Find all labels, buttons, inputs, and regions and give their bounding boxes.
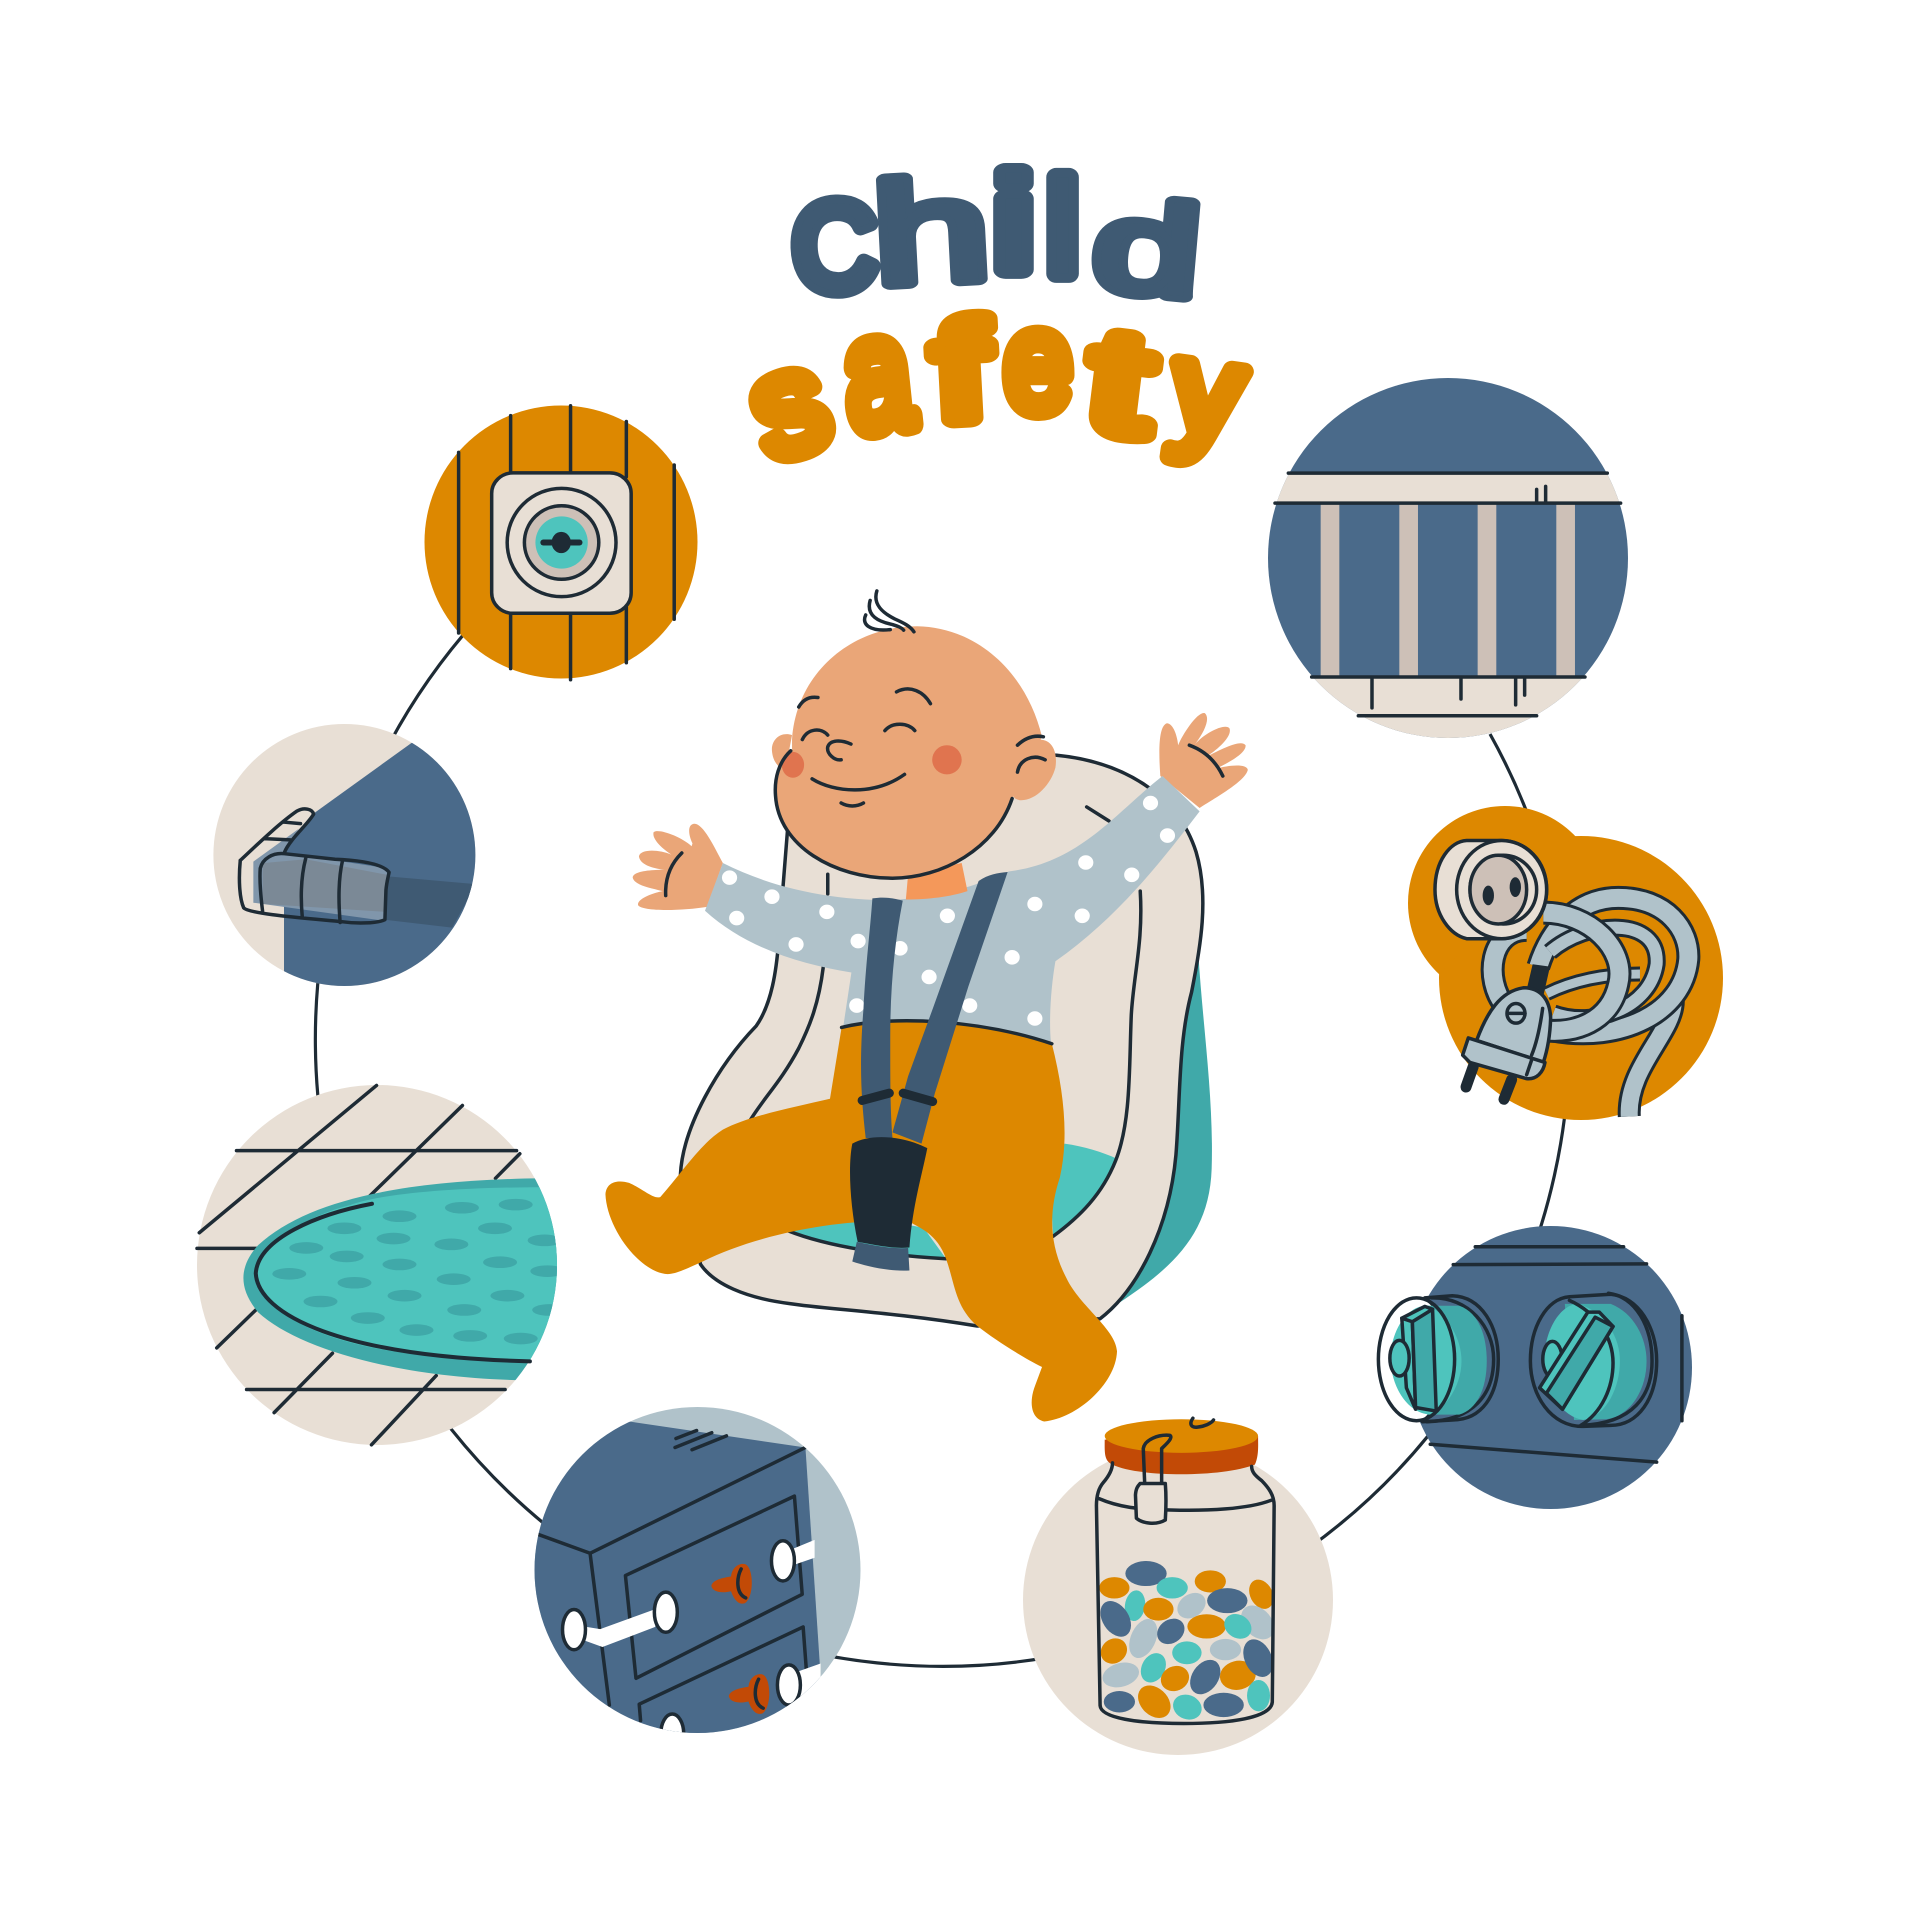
wall plank lines and socket plate: [459, 406, 674, 680]
protector pad: [239, 809, 389, 923]
title: safety: e: [1005, 283, 1071, 440]
title: Child: C: [790, 178, 879, 317]
strap clips: [862, 1093, 933, 1102]
panel: door latches: [1378, 1226, 1692, 1509]
cable coils: [1493, 898, 1688, 1116]
panel: cabinet drawer locks: [534, 1407, 860, 1733]
baby in car seat: [605, 591, 1248, 1421]
seat shell back: [1118, 953, 1212, 1304]
title: safety: s: [730, 318, 846, 490]
waistband line: [842, 1021, 1052, 1044]
title: safety: f: [931, 293, 991, 449]
title: safety: t: [1082, 299, 1159, 466]
panel: unplugged cable and wall socket: [1408, 806, 1723, 1120]
seat cushion: [680, 755, 1203, 1326]
panel: socket cover on wooden wall: [424, 406, 698, 680]
red knobs: [711, 1564, 769, 1714]
seat pad: [788, 1144, 1117, 1259]
title: Child: h: [870, 148, 993, 315]
panel: corner protector: [214, 724, 476, 986]
title: safety: [730, 283, 1251, 490]
harness straps: [861, 872, 1008, 1144]
onesie top with polka dots: [705, 776, 1200, 1043]
rail lines: [1275, 473, 1621, 716]
seat inner lines: [750, 807, 1141, 1259]
bath mat with dots: [243, 1178, 570, 1381]
harness buckle: [850, 1137, 927, 1248]
strap ends: [563, 1541, 800, 1754]
wall socket: [1435, 840, 1547, 939]
neck: [906, 863, 967, 900]
cabinet body: [534, 1422, 821, 1733]
title: Child: i: [994, 149, 1033, 298]
jar lid: [1105, 1436, 1258, 1474]
head: [772, 591, 1056, 878]
pants: [605, 1021, 1117, 1421]
title: Child: l: [1047, 154, 1078, 303]
panel: anti-slip bath mat on tiles: [197, 1085, 570, 1445]
left latch knob: [1378, 1296, 1498, 1422]
panel: medicine jar with pills: [1023, 1418, 1333, 1755]
title: safety: a: [836, 284, 919, 465]
mat outline: [256, 1204, 530, 1361]
jar latch: [1143, 1435, 1171, 1482]
jar outline: [1096, 1463, 1274, 1724]
title: Child: d: [1088, 173, 1206, 325]
cabinet edges and drawer fronts: [537, 1431, 807, 1721]
pills: [1095, 1561, 1281, 1723]
panel: window guard rails: [1268, 378, 1628, 738]
title: Child: [790, 148, 1206, 325]
left hand: [633, 824, 723, 910]
white lock straps: [584, 1540, 821, 1703]
wall lines: [1430, 1247, 1682, 1462]
right hand: [1159, 713, 1248, 808]
connector ring linking the safety panels: [315, 627, 1569, 1666]
plug: [1463, 964, 1551, 1099]
right latch knob: [1530, 1293, 1657, 1426]
title: safety: y: [1164, 315, 1251, 468]
floor tile lines: [197, 1085, 520, 1445]
